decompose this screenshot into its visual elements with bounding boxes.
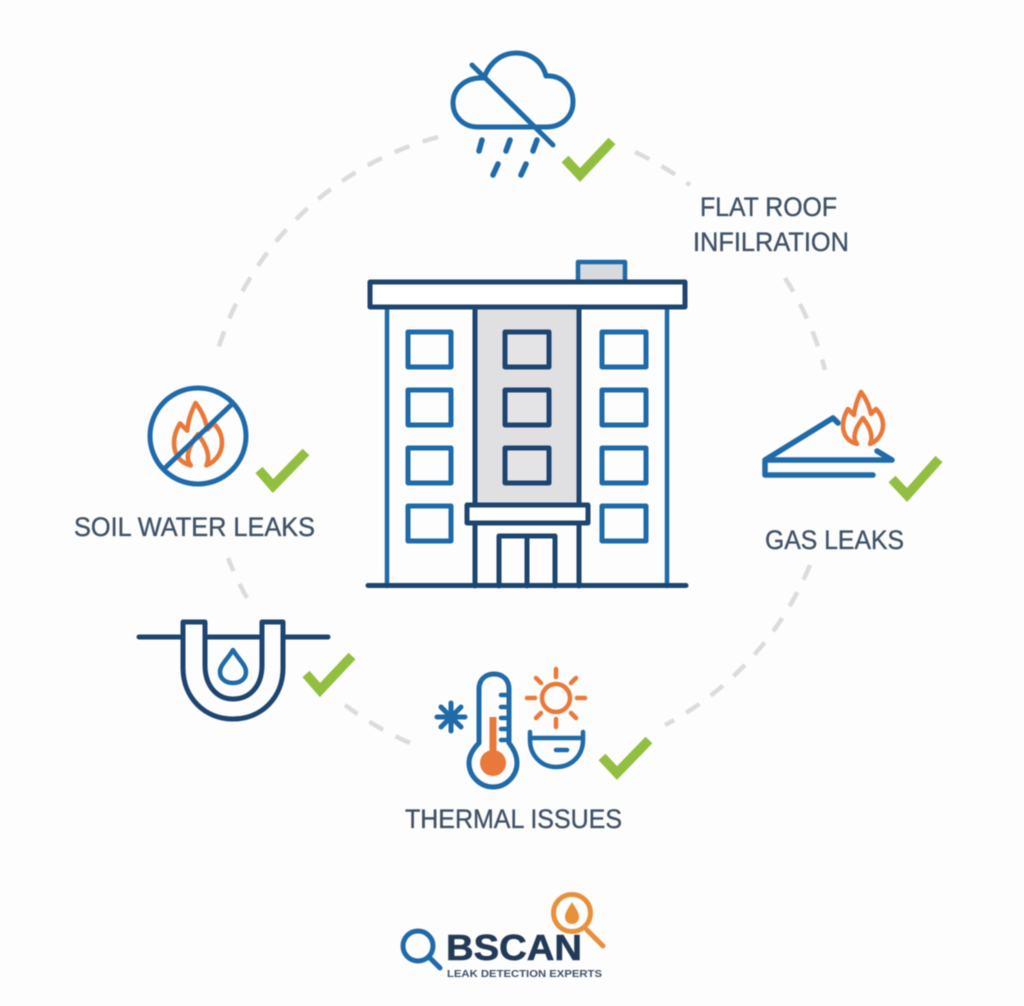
label: flat roof infiltration: FLAT ROOF [700, 192, 837, 222]
check mark: pipe [306, 656, 352, 690]
check mark: soil water leaks [259, 452, 306, 486]
icon: U-shaped pipe with water drop [139, 622, 328, 719]
dashed ring connecting the icons [215, 137, 825, 743]
label: flat roof infiltration [693, 192, 849, 257]
icon: crossed-out rain cloud [453, 53, 573, 175]
logo wordmark: BSCAN [446, 927, 582, 968]
label: flat roof infiltration: INFILRATION [693, 227, 849, 257]
logo tagline: LEAK DETECTION EXPERTS [447, 968, 602, 980]
label: soil water leaks: SOIL WATER LEAKS [74, 512, 315, 542]
icon: no-fire sign [150, 388, 246, 484]
check mark: gas leaks [892, 459, 939, 495]
label: thermal issues: THERMAL ISSUES [405, 804, 622, 834]
label: gas leaks: GAS LEAKS [765, 525, 904, 555]
check mark: flat roof [565, 141, 612, 175]
icon: central building [368, 262, 686, 586]
icon: roof with flame [765, 392, 892, 475]
logo: BSCAN leak detection experts [403, 894, 603, 980]
logo icon: blue magnifier [403, 931, 440, 968]
logo icon: orange magnifier with drop [554, 894, 603, 946]
icon: thermometer, snowflake, sun and bowl [437, 669, 585, 787]
check mark: thermal issues [602, 740, 649, 773]
